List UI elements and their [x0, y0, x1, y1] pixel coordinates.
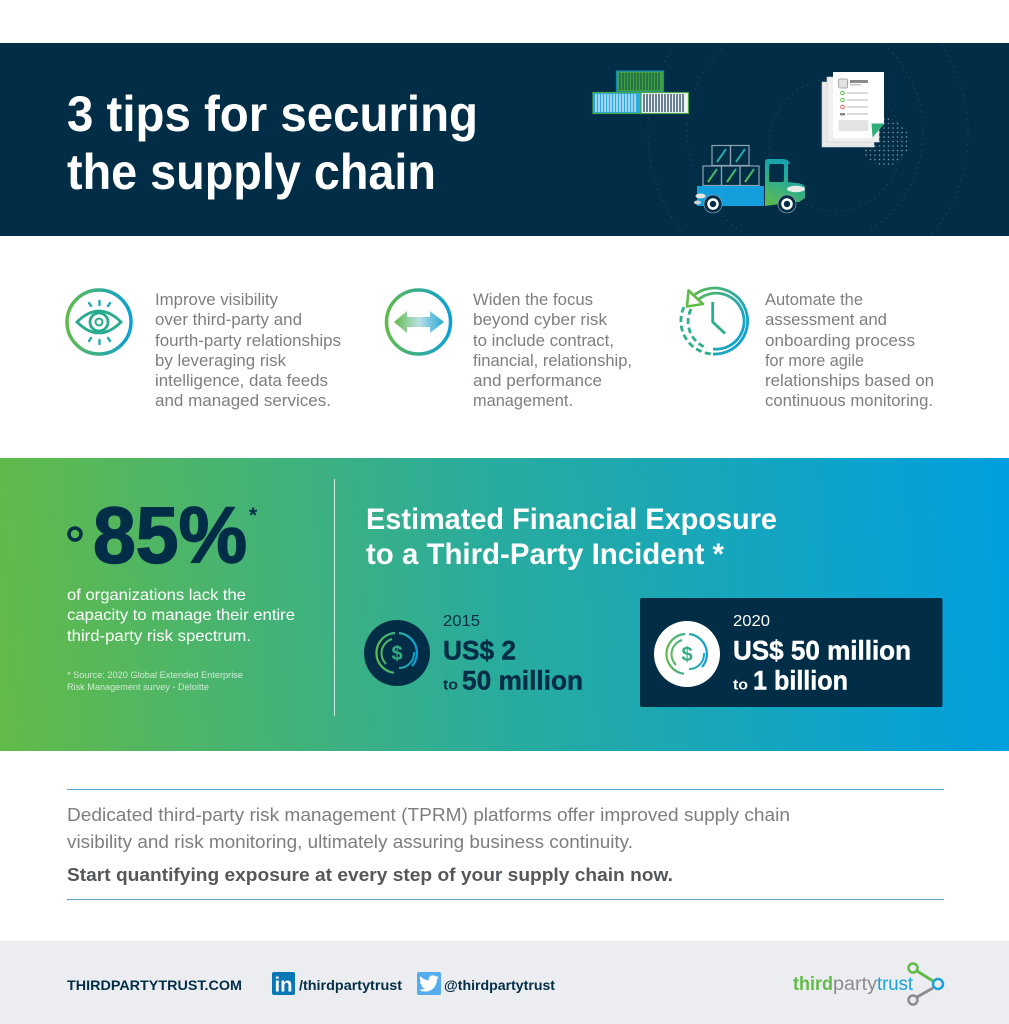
- tip 1 text: and managed services.: [155, 392, 331, 410]
- 2015 values: US$ 2: [443, 636, 516, 666]
- stat description: of organizations lack the: [67, 587, 246, 604]
- 2020 values: to: [733, 676, 748, 694]
- 2020 exposure box: [640, 598, 942, 707]
- tip 1 text: by leveraging risk: [155, 352, 287, 370]
- icon: double arrow: [386, 290, 450, 354]
- title: 3 tips for securing: [67, 86, 478, 142]
- closing statement: visibility and risk monitoring, ultimately assuring business continuity.: [67, 832, 633, 852]
- tip 1: visibility: [67, 290, 341, 410]
- tip 3 text: for more agile: [765, 352, 864, 370]
- icon: dollar coin dark: $: [391, 643, 403, 665]
- tip 2 text: and performance: [473, 372, 602, 390]
- stat description: [67, 587, 295, 645]
- source note: * Source: 2020 Global Extended Enterprise: [67, 670, 243, 680]
- tip 3 text: [765, 291, 934, 410]
- 2020 values: [733, 613, 911, 696]
- exposure heading: Estimated Financial Exposure: [366, 503, 777, 536]
- 2015 values: [443, 613, 583, 696]
- twitter: [417, 972, 555, 995]
- icon: shipping containers: [593, 71, 688, 114]
- 2015 exposure: [364, 613, 583, 696]
- tip 2 text: to include contract,: [473, 332, 614, 350]
- tip 2 text: Widen the focus: [473, 291, 593, 309]
- tip 3 text: assessment and: [765, 311, 887, 329]
- gradient statistics band: [0, 458, 1009, 751]
- icon: document stack: [822, 72, 884, 147]
- 2020 values: US$ 50 million: [733, 636, 911, 666]
- icon: dollar coin light: $: [681, 644, 693, 666]
- icon: dollar coin dark: [364, 620, 430, 686]
- closing statement: Start quantifying exposure at every step of your supply chain now.: [67, 865, 673, 885]
- closing statement: [67, 805, 790, 885]
- tip 2 text: financial, relationship,: [473, 352, 632, 370]
- logo: third: [793, 974, 833, 995]
- 2015 values: 50 million: [462, 666, 583, 696]
- tip 2 text: management.: [473, 392, 573, 410]
- exposure heading: [366, 503, 777, 571]
- 2020 values: 1 billion: [753, 666, 848, 696]
- stat: 85%: *: [249, 504, 258, 527]
- closing statement: Dedicated third-party risk management (TPRM) platforms offer improved supply chain: [67, 805, 790, 825]
- linkedin: /thirdpartytrust: [299, 977, 402, 993]
- tip 2 text: beyond cyber risk: [473, 311, 608, 329]
- 2020 values: 2020: [733, 613, 770, 630]
- dotted orbit circles: [648, 44, 968, 236]
- tip 1 text: intelligence, data feeds: [155, 372, 328, 390]
- icon: clock with arrow: [681, 288, 748, 354]
- tip 1 text: over third-party and: [155, 311, 302, 329]
- tip 3: automate: [681, 288, 934, 410]
- stat description: capacity to manage their entire: [67, 607, 295, 624]
- title: [67, 86, 478, 200]
- tip 3 text: continuous monitoring.: [765, 392, 933, 410]
- icon: dollar coin light: [654, 621, 720, 687]
- source note: Risk Management survey - Deloitte: [67, 682, 209, 692]
- tip 2 text: [473, 291, 632, 410]
- logo: trust: [877, 974, 914, 995]
- logo: party: [833, 974, 878, 995]
- icon: delivery truck: [694, 146, 805, 213]
- logo: [793, 964, 943, 1004]
- linkedin: in: [274, 974, 292, 996]
- website: THIRDPARTYTRUST.COM: [67, 977, 242, 993]
- 2015 values: 2015: [443, 613, 480, 630]
- footer: [0, 941, 1009, 1024]
- tip 2: widen focus: [386, 290, 632, 410]
- title: the supply chain: [67, 144, 436, 200]
- tip 3 text: onboarding process: [765, 332, 915, 350]
- icon: eye: [67, 290, 131, 354]
- stat: 85%: 85%: [93, 490, 247, 580]
- 2015 values: to: [443, 676, 458, 694]
- tip 3 text: relationships based on: [765, 372, 934, 390]
- exposure heading: to a Third-Party Incident *: [366, 538, 724, 571]
- twitter: @thirdpartytrust: [444, 977, 555, 993]
- tip 3 text: Automate the: [765, 291, 863, 309]
- stat description: third-party risk spectrum.: [67, 628, 251, 645]
- halftone dots: [861, 118, 909, 166]
- linkedin: [272, 972, 402, 996]
- tip 1 text: Improve visibility: [155, 291, 279, 309]
- tip 1 text: [155, 291, 341, 410]
- header banner: [0, 43, 1009, 236]
- source note: [67, 670, 243, 692]
- tip 1 text: fourth-party relationships: [155, 332, 341, 350]
